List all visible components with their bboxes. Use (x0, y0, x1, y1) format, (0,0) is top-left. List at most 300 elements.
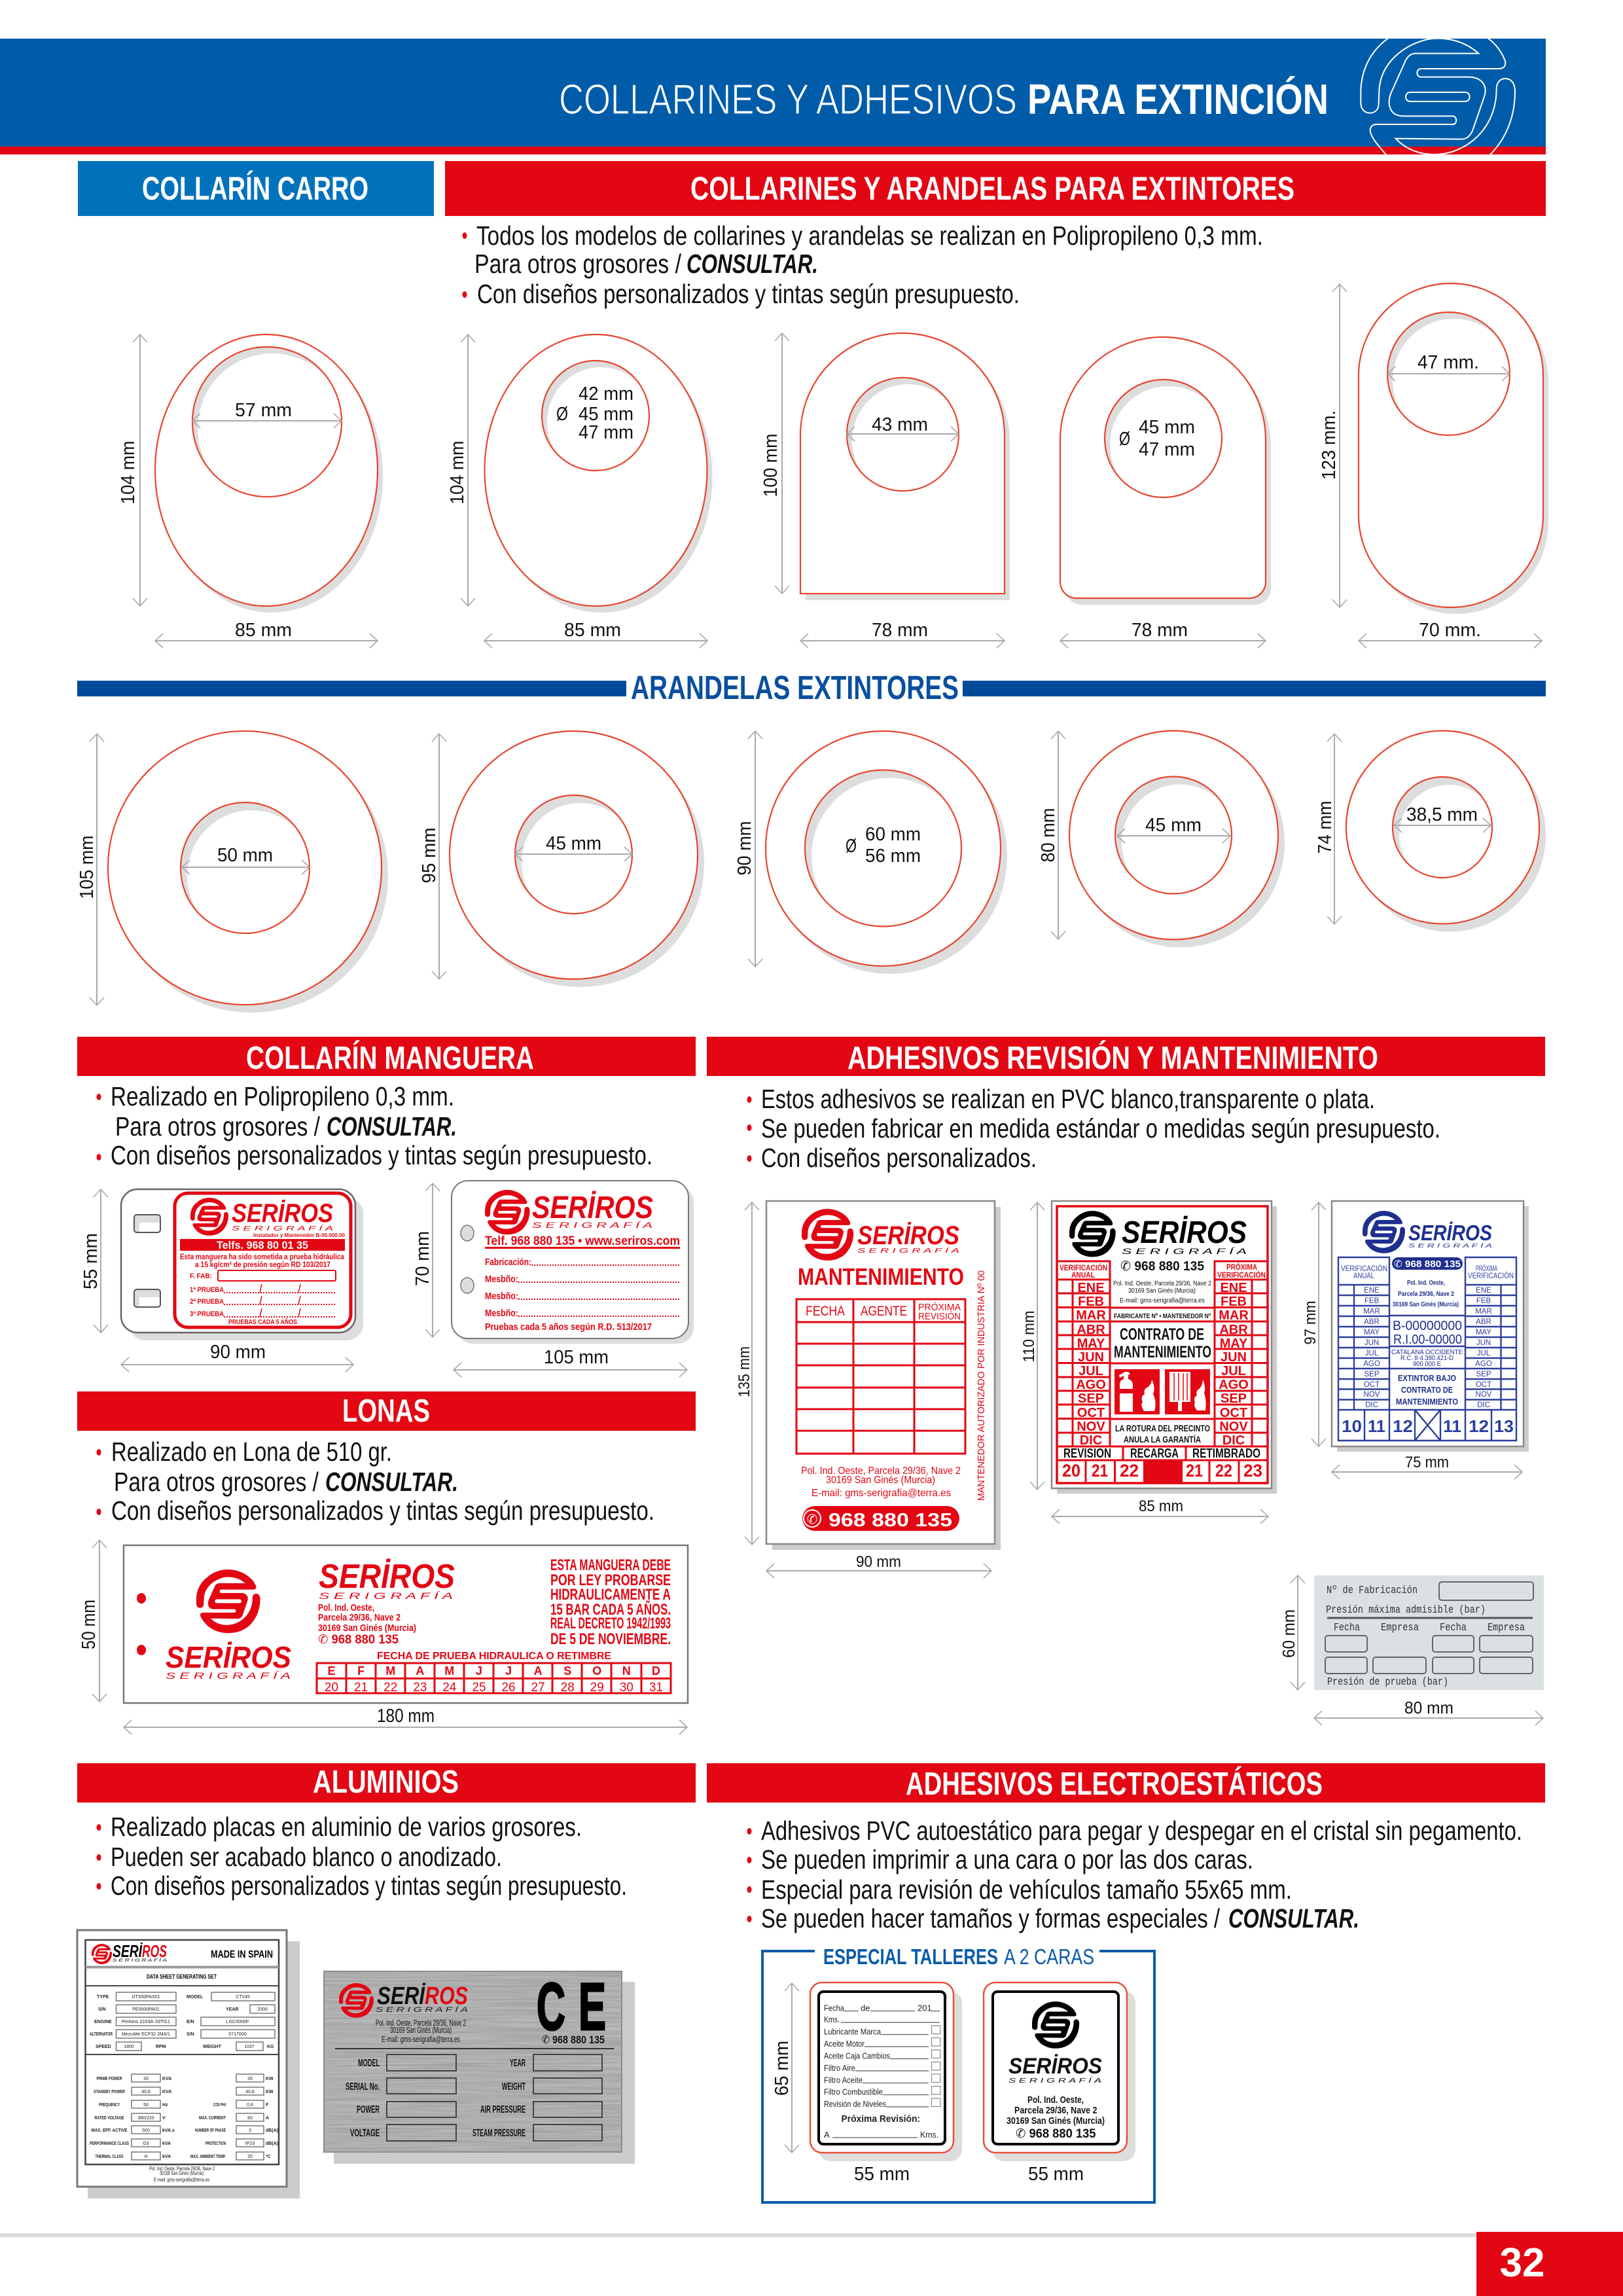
right verification column: NOV (1219, 1420, 1248, 1434)
data plate header: S E R I G R A F Í A (113, 1958, 167, 1963)
data plate labels: IP23 (245, 2142, 255, 2146)
washer 5, 38,5 mm (1315, 730, 1546, 932)
data plate header: MADE IN SPAIN (211, 1949, 273, 1960)
blue centre text: CONTRATO DE (1401, 1385, 1453, 1395)
data plate labels: 26 (247, 2077, 253, 2081)
blue centre text: Pol. Ind. Oeste, (1407, 1280, 1445, 1287)
blue column text: ABR (1364, 1318, 1380, 1326)
heading: arandelas extintores: ARANDELAS EXTINTORES (631, 669, 959, 706)
metal plate labels: YEAR (510, 2058, 526, 2069)
banner printed text: FECHA DE PRUEBA HIDRAULICA O RETIMBRE (377, 1651, 611, 1662)
blue column text: MAR (1363, 1308, 1380, 1316)
title: COLLARINES Y ADHESIVOS (559, 75, 1017, 123)
sticker printed text: SERİROS (857, 1221, 959, 1250)
maintenance table: PRÓXIMA (918, 1302, 961, 1313)
data plate labels: 3 (249, 2128, 251, 2133)
text block: adhesivos revisión (747, 1084, 1440, 1173)
banner printed text: ✆ 968 880 135 (318, 1633, 399, 1647)
plate labels: Fecha (1334, 1622, 1360, 1634)
data plate labels: 40,8 (141, 2090, 151, 2094)
hose tag 90x55 mm (80, 1189, 363, 1365)
tag printed text: a 15 kg/cm² de presión según RD 103/2017 (195, 1260, 330, 1269)
CE mark: E (579, 1969, 606, 2044)
text block: collarín manguera: Con diseños personalizados y tintas según presupuesto. (111, 1140, 652, 1170)
blue column text: OCT (1476, 1381, 1491, 1389)
blue number row: 11 (1368, 1416, 1385, 1436)
data plate header: SERİ (113, 1941, 143, 1961)
collar shape 3, 43 mm: 100 mm (760, 433, 781, 497)
data plate labels: A (266, 2116, 269, 2121)
text block: adhesivos electroestáticos: Se pueden imprimir a una cara o por las dos caras. (761, 1844, 1253, 1874)
centre text: MANTENIMIENTO (1114, 1343, 1211, 1361)
centre text: ANULA LA GARANTÍA (1124, 1434, 1201, 1444)
windshield sticker front (810, 1982, 962, 2161)
checklist: de (861, 2003, 870, 2013)
icon: fire extinguisher sign (1115, 1369, 1160, 1414)
data plate labels: 40,8 (245, 2090, 255, 2094)
heading: collarín manguera: COLLARÍN MANGUERA (246, 1041, 534, 1076)
blue column text: JUL (1365, 1350, 1379, 1357)
metal plate labels: SERIAL No. (346, 2081, 380, 2092)
collar shape 2, 42/45/47 mm: 85 mm (564, 620, 621, 641)
data plate labels: PRIME POWER (97, 2077, 122, 2081)
panel title: ESPECIAL TALLERES (823, 1945, 998, 1969)
text block: lonas: CONSULTAR. (325, 1467, 458, 1497)
icon: hose reel sign (1165, 1369, 1210, 1414)
collar shape 4, 45/47 mm: 45 mm (1139, 417, 1195, 438)
collar shape 1, 57 mm: 85 mm (235, 620, 292, 641)
title: PARA EXTINCIÓN (1027, 75, 1329, 123)
data plate labels: NUMBER OF PHASE (195, 2128, 226, 2133)
icon: blue logo (1363, 1211, 1405, 1253)
blue centre text: EXTINTOR BAJO (1398, 1373, 1456, 1383)
bottom table: 20 (1062, 1461, 1080, 1480)
tag printed text: Instalador y Mantenedor B-00.000.00 (253, 1232, 346, 1238)
data plate labels: PROTECTION (205, 2142, 226, 2146)
tag printed text (180, 1199, 346, 1326)
blue column text: NOV (1364, 1391, 1380, 1399)
metal plate branding: S E R I G R A F Í A (376, 2005, 468, 2014)
centre text: CONTRATO DE (1120, 1325, 1204, 1344)
month / year table: J (505, 1664, 512, 1677)
blue number row: 11 (1443, 1416, 1461, 1436)
left verification column: DIC (1080, 1433, 1102, 1448)
blue column text: MAY (1476, 1329, 1491, 1336)
text block: lonas: Con diseños personalizados y tintas según presupuesto. (111, 1496, 654, 1526)
washer 1, 50 mm: 105 mm (77, 835, 98, 899)
checklist: Revisión de Niveles (824, 2099, 886, 2109)
collar shape 4, 45/47 mm: 47 mm (1139, 439, 1195, 460)
sticker: contrato de mantenimiento 85x110 mm (1020, 1201, 1277, 1516)
checklist: Kms. (920, 2130, 938, 2140)
panel: especial talleres a 2 caras (762, 1945, 1154, 2202)
left verification column: ENE (1077, 1281, 1105, 1295)
data plate labels: kVA (162, 2155, 171, 2159)
data plate labels: 50 (143, 2103, 149, 2108)
data plate labels: V (162, 2116, 166, 2121)
data plate header: ROS (142, 1941, 167, 1961)
text block: adhesivos electroestáticos: Se pueden hacer tamaños y formas especiales / (761, 1903, 1220, 1933)
month / year table: M (444, 1664, 454, 1677)
blue column text: VERIFICACIÓN (1341, 1263, 1387, 1273)
text block: aluminios: Con diseños personalizados y tintas según presupuesto. (111, 1871, 627, 1901)
blue centre text: Parcela 29/36, Nave 2 (1398, 1291, 1454, 1298)
data plate labels (90, 1995, 278, 2159)
tag printed text: Fabricación: (485, 1257, 531, 1268)
left verification column: FEB (1078, 1295, 1104, 1309)
data plate labels: TYPE (97, 1995, 109, 2000)
sticker back text: SERİROS (1008, 2054, 1102, 2079)
bottom table: 22 (1215, 1461, 1232, 1480)
banner printed text: SERİROS (166, 1640, 291, 1674)
header band (0, 39, 1546, 154)
data plate labels: MAX. EFF. ACTIVE (92, 2128, 128, 2133)
icon: header logo outline (1360, 39, 1516, 154)
data plate labels: STANDBY POWER (94, 2090, 125, 2094)
phone pill: ✆ (807, 1513, 817, 1527)
centre text: Pol. Ind. Oeste, Parcela 29/36, Nave 2 (1113, 1280, 1211, 1287)
blue number row: 12 (1469, 1416, 1489, 1436)
sticker back text: Pol. Ind. Oeste, (1027, 2094, 1084, 2106)
data plate labels: PERFORMANCE CLASS (90, 2142, 129, 2146)
washer 2, 45 mm: 45 mm (546, 833, 601, 854)
left verification column: MAY (1077, 1336, 1105, 1351)
metal plate branding: 30169 San Ginés (Murcia) (390, 2025, 452, 2035)
tag printed text (485, 1191, 680, 1333)
banner printed text (166, 1556, 671, 1681)
left verification column: AGO (1076, 1378, 1106, 1392)
data plate labels: 83 (247, 2116, 253, 2121)
plate labels: Nº de Fabricación (1327, 1585, 1418, 1597)
sticker printed text: S E R I G R A F Í A (857, 1246, 960, 1255)
data plate labels: 2000 (257, 2007, 268, 2012)
data plate labels: kVA (162, 2142, 171, 2146)
checkboxes (932, 2026, 940, 2106)
month / year table: 31 (649, 1681, 663, 1695)
blue column text: JUL (1477, 1350, 1491, 1357)
blue centre text: R.I.00-00000 (1393, 1333, 1462, 1347)
tag printed text: PRUEBAS CADA 5 AÑOS (228, 1318, 297, 1326)
blue centre text: R.C. 8-4.380.421-D (1400, 1355, 1454, 1362)
right verification column: FEB (1221, 1295, 1247, 1309)
heading: lonas (77, 1391, 696, 1431)
grey plate 80x60 mm: 60 mm (1279, 1609, 1298, 1658)
data plate labels: 25 (247, 2155, 253, 2159)
blue column text: JUN (1364, 1339, 1379, 1347)
month / year table: 20 (325, 1681, 338, 1695)
data plate labels: LGC0000P (226, 2020, 249, 2024)
data plate labels: dB(A) (266, 2142, 278, 2146)
panel: especial talleres a 2 caras: 55 mm (854, 2164, 910, 2185)
collar shape 5, 47 mm: 123 mm. (1319, 410, 1340, 480)
maintenance table: REVISIÓN (918, 1311, 961, 1322)
left verification column: JUL (1079, 1364, 1103, 1378)
month / year table: A (534, 1664, 543, 1677)
washer 2, 45 mm (419, 731, 704, 987)
plate labels: Empresa (1381, 1622, 1419, 1634)
checklist: Aceite Caja Cambios (824, 2051, 890, 2060)
heading: collarín carro (78, 161, 434, 216)
text block: adhesivos electroestáticos (747, 1816, 1522, 1933)
left verification column: NOV (1077, 1420, 1105, 1434)
blue column text: SEP (1476, 1371, 1491, 1378)
aluminium data plate (77, 1930, 300, 2198)
centre text: E-mail: gms-serigrafia@terra.es (1120, 1297, 1205, 1304)
month / year table: J (476, 1664, 482, 1677)
right verification column (1215, 1261, 1268, 1448)
text block: collarines description: Con diseños personalizados y tintas según presupuesto. (477, 279, 1020, 309)
bottom table (1057, 1446, 1268, 1483)
data plate labels: KG (267, 2045, 274, 2049)
text block: adhesivos revisión: Con diseños personalizados. (761, 1143, 1037, 1173)
metal plate labels: POWER (357, 2104, 380, 2115)
blue column text: NOV (1476, 1391, 1492, 1399)
data plate labels: S/N (187, 2032, 194, 2037)
tag printed text: Telfs. 968 80 01 35 (217, 1239, 308, 1251)
bottom table: 21 (1092, 1461, 1108, 1480)
panel: especial talleres a 2 caras: 65 mm (772, 2041, 793, 2096)
sticker back text (1007, 2054, 1105, 2141)
checklist: Filtro Aire (824, 2063, 855, 2073)
data plate labels: 1037 (244, 2045, 255, 2049)
collar shape 1, 57 mm (118, 334, 383, 641)
hose tag 90x55 mm: 55 mm (80, 1233, 101, 1289)
banner printed text: ESTA MANGUERA DEBE (550, 1556, 671, 1574)
collar shape 5, 47 mm: 70 mm. (1419, 620, 1481, 641)
data plate labels: G3 (143, 2142, 149, 2146)
washer 3, 60/56 mm: 60 mm (865, 824, 921, 845)
collar shape 2, 42/45/47 mm: 47 mm (579, 422, 633, 443)
tag slots (134, 1215, 160, 1307)
blue centre text (1391, 1280, 1463, 1407)
text block: aluminios: Realizado placas en aluminio de varios grosores. (111, 1812, 582, 1842)
blue column text: AGO (1363, 1360, 1380, 1368)
hose tag 90x55 mm: 90 mm (210, 1342, 266, 1363)
text block: aluminios: Pueden ser acabado blanco o anodizado. (111, 1842, 502, 1872)
checklist (824, 2003, 938, 2140)
metal plate branding: SERİ (377, 1982, 426, 2010)
heading: adhesivos electroestáticos (707, 1763, 1545, 1803)
collar shape 2, 42/45/47 mm: 42 mm (579, 384, 633, 404)
text block: adhesivos revisión: Se pueden fabricar en medida estándar o medidas según presupuesto. (761, 1113, 1440, 1143)
panel: especial talleres a 2 caras: 55 mm (1028, 2164, 1084, 2185)
month / year table: 24 (442, 1681, 457, 1695)
text block: collarín manguera (97, 1081, 652, 1170)
text block: adhesivos electroestáticos: CONSULTAR. (1228, 1903, 1359, 1933)
plate labels: Presión máxima admisible (bar) (1326, 1604, 1486, 1617)
brushed metal plate (324, 1969, 635, 2164)
plate labels: Fecha (1440, 1622, 1467, 1634)
metal plate labels: AIR PRESSURE (480, 2104, 526, 2115)
tag printed text: S E R I G R A F Í A (532, 1220, 652, 1230)
data plate address: Pol. Ind. Oeste, Parcela 29/36, Nave 2 (149, 2166, 215, 2172)
heading: collarines y arandelas (445, 161, 1546, 216)
icon: red logo (802, 1209, 853, 1261)
banner sample 180x50 mm: 180 mm (377, 1706, 435, 1727)
data plate labels: WEIGHT (203, 2045, 222, 2049)
collar shape 2, 42/45/47 mm (447, 334, 712, 641)
data plate labels: 0717000 (228, 2032, 247, 2037)
tag printed text: 1ª PRUEBA (190, 1286, 224, 1294)
right verification column: MAR (1219, 1308, 1249, 1323)
icon: red logo (485, 1190, 530, 1234)
metal plate labels: WEIGHT (502, 2081, 526, 2092)
metal plate labels: STEAM PRESSURE (473, 2128, 526, 2139)
data plate labels: Perkins 1103A-33TG1 (122, 2020, 170, 2024)
tag printed text: S E R I G R A F Í A (232, 1224, 334, 1232)
blue column text: PRÓXIMA (1476, 1263, 1497, 1273)
sticker printed text: MANTENIMIENTO (798, 1263, 964, 1290)
sticker back text: ✆ 968 880 135 (1016, 2127, 1096, 2141)
left verification column: OCT (1077, 1406, 1105, 1420)
month / year table: M (385, 1664, 395, 1677)
data plate labels: THERMAL CLASS (96, 2155, 124, 2159)
data plate labels: MAX. CURRENT (199, 2116, 226, 2121)
tag printed text: Mesbño: (485, 1274, 518, 1285)
month / year table: 22 (383, 1681, 397, 1695)
left verification column (1057, 1261, 1110, 1448)
heading: aluminios (77, 1763, 696, 1803)
sticker: contrato de mantenimiento 85x110 mm: 85 mm (1139, 1498, 1183, 1515)
heading: arandelas extintores (77, 669, 1546, 706)
collar shape 2, 42/45/47 mm: Ø (556, 404, 568, 425)
data plate address: E-mail: gms-serigrafia@terra.es (154, 2177, 209, 2183)
month / year table: A (416, 1664, 424, 1677)
washer 3, 60/56 mm: Ø (846, 836, 857, 857)
text block: collarines description: CONSULTAR. (687, 249, 818, 279)
metal plate branding: ROS (425, 1982, 468, 2010)
month / year table: 23 (413, 1681, 427, 1695)
banner printed text: DE 5 DE NOVIEMBRE. (550, 1630, 671, 1648)
heading: collarín manguera (77, 1037, 696, 1076)
metal plate branding: Pol. Ind. Oeste, Parcela 29/36, Nave 2 (376, 2018, 466, 2028)
text block: lonas: Para otros grosores / (114, 1467, 319, 1497)
maintenance table: FECHA (806, 1304, 845, 1319)
footer page number (0, 2232, 1623, 2296)
washer 3, 60/56 mm: 90 mm (734, 821, 755, 876)
bottom table: 23 (1243, 1461, 1262, 1480)
tag printed text: 2ª PRUEBA (190, 1298, 224, 1306)
text block: collarín manguera: Realizado en Polipropileno 0,3 mm. (111, 1081, 454, 1111)
panel title: A 2 CARAS (1004, 1945, 1094, 1969)
right verification column: DIC (1222, 1433, 1245, 1448)
data plate labels: KW (266, 2077, 274, 2081)
data plate labels: E/N (187, 2020, 194, 2024)
data plate labels: MAX. AMBIENT TEMP. (190, 2155, 226, 2159)
blue number row (1342, 1416, 1514, 1436)
heading: adhesivos electroestáticos: ADHESIVOS ELECTROESTÁTICOS (906, 1767, 1323, 1802)
blue column text: VERIFICACIÓN (1468, 1270, 1514, 1280)
phone pill: 968 880 135 (829, 1510, 952, 1531)
checklist: Próxima Revisión: (842, 2113, 920, 2125)
sticker: contrato de mantenimiento 85x110 mm: S E R I G R A F Í A (1122, 1246, 1247, 1256)
banner printed text: POR LEY PROBARSE (550, 1571, 671, 1589)
data plate labels: RATED VOLTAGE (94, 2116, 124, 2121)
washer 1, 50 mm (77, 731, 388, 1013)
blue tables (1338, 1257, 1516, 1441)
right verification column: SEP (1221, 1391, 1247, 1406)
bottom table: REVISION (1063, 1446, 1111, 1461)
blue centre text: CATALANA OCCIDENTE (1391, 1349, 1463, 1356)
banner printed text: REAL DECRETO 1942/1993 (550, 1615, 671, 1632)
plate labels (1326, 1585, 1525, 1689)
data plate header (113, 1941, 273, 1980)
right verification column: ABR (1219, 1323, 1248, 1337)
left verification column: ANUAL (1071, 1270, 1095, 1280)
data plate labels: PE0000PA01 (132, 2007, 160, 2012)
collar shape 1, 57 mm: 57 mm (235, 400, 292, 421)
checklist: A (824, 2130, 830, 2140)
washer 2, 45 mm: 95 mm (419, 827, 440, 884)
hose tag 105x70 mm: 105 mm (544, 1347, 609, 1368)
banner printed text: S E R I G R A F Í A (319, 1590, 453, 1601)
sticker: mantenimiento 90x135 mm: MANTENEDOR AUTORIZADO POR INDUSTRIA Nº 00 (976, 1270, 987, 1501)
collar shape 4, 45/47 mm: 78 mm (1132, 620, 1188, 641)
month / year table: 27 (531, 1681, 545, 1695)
month / year table (317, 1663, 671, 1695)
collar shape 2, 42/45/47 mm: 104 mm (447, 441, 468, 504)
text block: lonas (97, 1437, 654, 1526)
month / year table: 28 (561, 1681, 575, 1695)
tag printed text: F. FAB: (190, 1272, 212, 1280)
data plate labels: 1800 (124, 2045, 134, 2049)
sticker: mantenimiento 90x135 mm: 135 mm (736, 1346, 753, 1397)
text block: collarín manguera: Para otros grosores / (115, 1111, 320, 1141)
icon: red logo (196, 1570, 260, 1633)
sticker: extintor bajo contrato, blue, 75x97 mm: S E R I G R A F Í A (1408, 1243, 1492, 1249)
washer 5, 38,5 mm: 38,5 mm (1406, 804, 1478, 825)
blue column text: MAY (1364, 1329, 1380, 1336)
sticker: mantenimiento 90x135 mm (736, 1201, 1001, 1571)
month / year table: N (622, 1664, 631, 1677)
washer 3, 60/56 mm (734, 731, 1007, 974)
maintenance table (796, 1299, 965, 1454)
blue column text: ANUAL (1353, 1271, 1374, 1280)
metal plate boxes (387, 2054, 602, 2141)
data plate labels: COS PHI (213, 2103, 226, 2108)
blue centre text: B-00000000 (1393, 1319, 1462, 1333)
banner printed text: S E R I G R A F Í A (166, 1670, 291, 1681)
collar shape 3, 43 mm: 78 mm (872, 620, 928, 641)
data plate labels: YEAR (226, 2007, 238, 2012)
right verification column: ENE (1220, 1281, 1247, 1295)
blue column text: JUN (1476, 1339, 1491, 1347)
blue column text: ENE (1476, 1287, 1491, 1295)
left verification column: MAR (1076, 1308, 1106, 1323)
blue number row: 13 (1494, 1416, 1514, 1436)
data plate address (149, 2166, 215, 2183)
CE mark (537, 1969, 606, 2044)
bottom table: RECARGA (1130, 1446, 1179, 1461)
left verification column: JUN (1078, 1350, 1104, 1365)
data plate address: 30169 San Ginés (Murcia) (160, 2170, 204, 2176)
sticker: extintor bajo contrato, blue, 75x97 mm: 75 mm (1405, 1454, 1449, 1471)
tag printed text: Mesbño: (485, 1291, 518, 1302)
metal plate labels: VOLTAGE (350, 2128, 380, 2139)
icon: black logo (1032, 2001, 1079, 2049)
icon: red logo (92, 1944, 112, 1964)
tag printed text: Esta manguera ha sido sometida a prueba hidráulica (180, 1252, 344, 1261)
text block: collarines description: Para otros grosores / (474, 249, 681, 279)
month / year table: D (652, 1664, 660, 1677)
icon: black logo (1069, 1211, 1116, 1257)
phone pill (802, 1506, 959, 1531)
blue centre text: 30169 San Ginés (Murcia) (1393, 1301, 1459, 1308)
blue centre text: MANTENIMIENTO (1396, 1397, 1458, 1407)
month / year table: 29 (590, 1681, 604, 1695)
sticker: contrato de mantenimiento 85x110 mm: 110 mm (1020, 1310, 1038, 1363)
grey plate 80x60 mm (1279, 1575, 1544, 1718)
